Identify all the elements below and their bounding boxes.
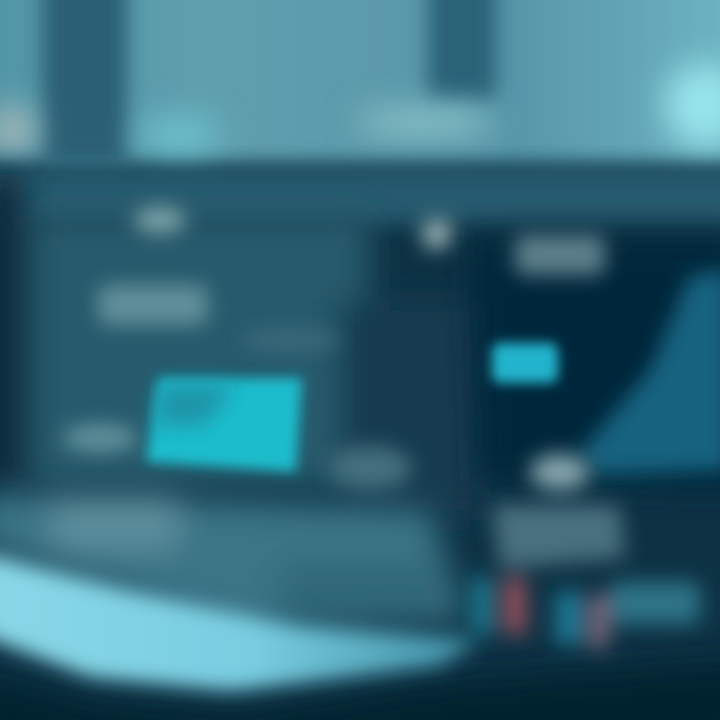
monitor text blurs [62,207,452,490]
dark right panel [470,240,720,490]
window columns [42,0,496,165]
cyan screen detail [155,385,235,425]
window backdrop [0,0,720,165]
monitor panel [0,175,480,520]
upper shelf band [0,168,720,224]
small cyan block [492,343,558,383]
window highlights [0,63,720,156]
bottom dark edge [0,660,720,720]
figurine group [472,454,700,648]
cyan screen block [146,378,302,472]
keyboard [0,492,465,625]
teal triangle chart [578,270,720,475]
right panel label [515,235,605,275]
desk surface [0,552,480,692]
